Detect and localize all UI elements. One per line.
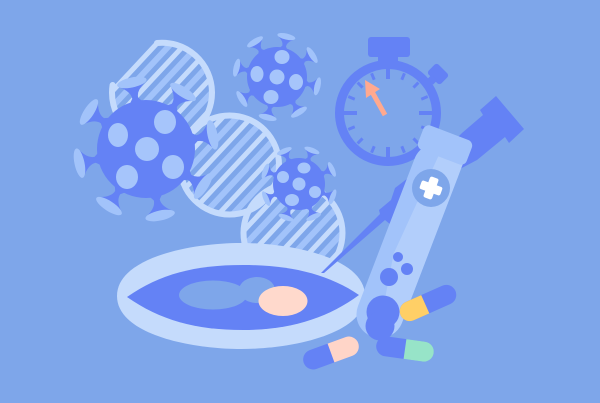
stopwatch <box>340 37 449 162</box>
petri dish <box>117 243 365 349</box>
capsule: yellow <box>397 282 459 324</box>
capsule: green <box>375 335 435 363</box>
virus: large <box>59 62 233 236</box>
peach culture <box>258 286 308 316</box>
illustration: laboratory scene <box>74 33 524 370</box>
dna strand: bottom <box>223 162 370 310</box>
dna strand: top <box>92 22 239 170</box>
icon: medical cross <box>412 169 450 207</box>
stopwatch hand <box>365 80 385 115</box>
capsule: peach <box>300 334 362 372</box>
tube cap <box>416 124 474 166</box>
dna strand: middle <box>159 94 306 242</box>
syringe plunger <box>445 96 524 170</box>
virus: top <box>224 24 330 130</box>
test tube <box>347 124 474 346</box>
virus: small <box>249 134 349 234</box>
culture blobs <box>179 277 275 310</box>
test tube bubbles <box>366 252 413 340</box>
syringe needle <box>321 175 425 273</box>
